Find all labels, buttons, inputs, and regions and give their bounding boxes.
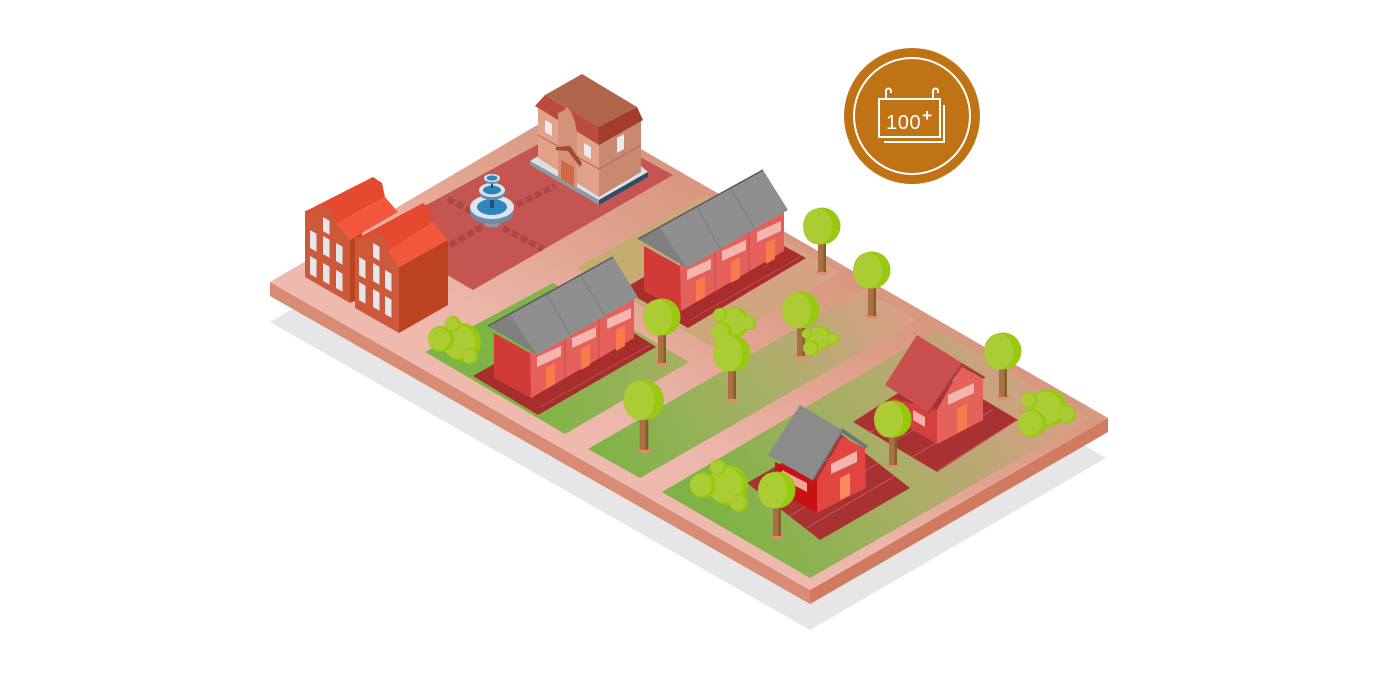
tree [803,208,840,275]
badge: 100+ calendar [844,48,980,184]
terraced houses: front [473,257,656,415]
bush: front lot [690,459,748,512]
manor plinth [530,155,648,205]
ground shadow [270,309,1106,630]
tree [713,334,750,402]
manor windows [545,120,624,159]
calendar icon [879,88,944,142]
terraced houses: back [623,170,806,328]
tree [623,380,664,453]
base slab [270,107,1108,604]
tree [874,400,912,468]
manor house [530,74,648,205]
badge label: + [922,106,933,125]
grey roof cottage [747,405,910,540]
gabled townhouse: back [304,177,398,303]
town square plaza [375,123,673,290]
lawn: back lot [577,195,840,347]
badge label: 100 [886,112,921,134]
bush: left lot [428,316,481,364]
manor roof [535,74,643,145]
manor walls [538,108,641,197]
tree [643,298,680,366]
lawn: middle lot [588,290,917,478]
lawn: right lot [662,330,1090,578]
bush: far right [1018,389,1076,437]
bush: beside centre tree [802,326,839,356]
lawn: front-left lot [425,283,689,434]
tree [984,332,1022,400]
tree [758,472,796,539]
tree [782,292,820,359]
tree [853,252,890,319]
manor central gable [556,107,582,188]
gabled townhouse: front [354,203,448,333]
red roof cottage [853,335,1018,472]
fountain [470,174,514,228]
bush: centre path [712,307,756,342]
